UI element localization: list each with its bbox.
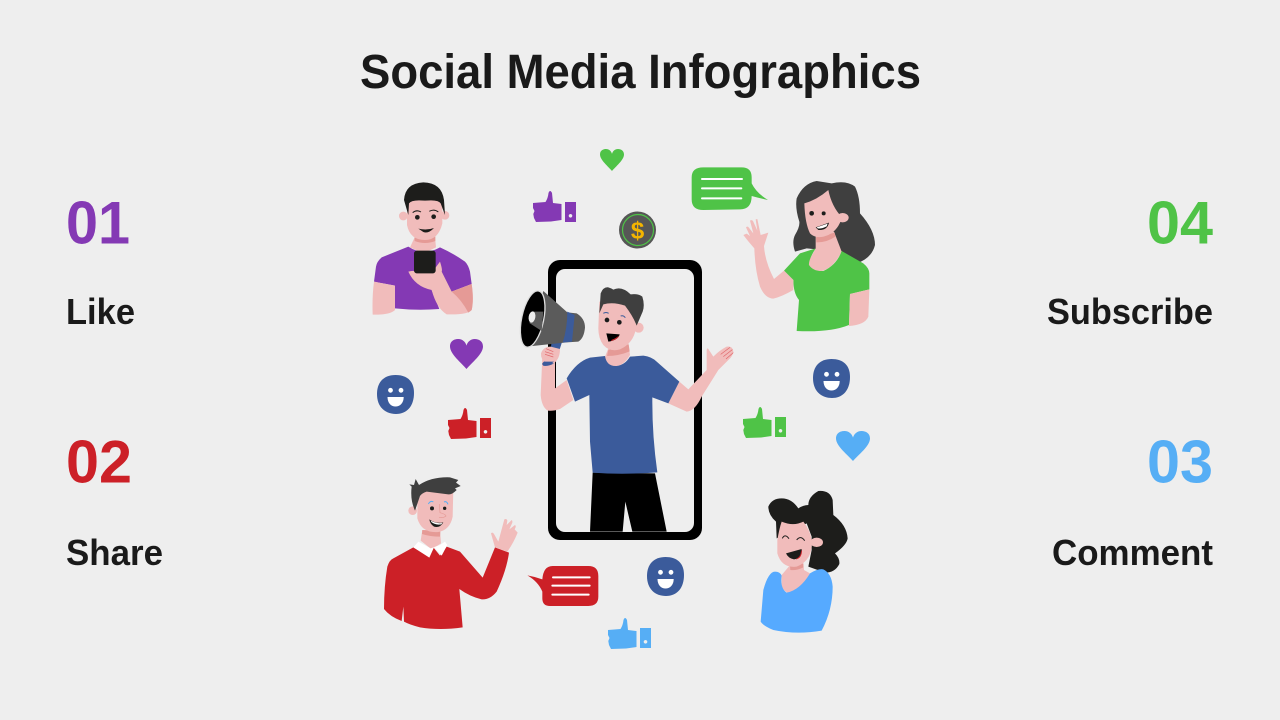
icon: green heart top [600, 149, 624, 171]
icon: smiley bottom [647, 557, 684, 596]
icon: purple thumbs up [533, 191, 576, 222]
item 01: Like [66, 190, 135, 332]
icon: smiley left [377, 375, 414, 414]
icon: green speech bubble [692, 167, 768, 210]
icon: blue thumbs up [608, 618, 651, 649]
item 03: Comment [1052, 428, 1213, 573]
label Share: Share [66, 532, 163, 573]
icon: blue heart [836, 431, 870, 461]
item 04: Subscribe [1047, 190, 1214, 332]
icon: red speech bubble [527, 566, 598, 606]
label Like: Like [66, 291, 135, 332]
person: green woman waving [743, 181, 875, 331]
number 01: 01 [66, 190, 130, 256]
icon: dollar coin: $ [631, 218, 645, 244]
number 04: 04 [1147, 190, 1214, 256]
title: Social Media Infographics [360, 46, 921, 99]
person: red man waving [384, 477, 518, 629]
item 02: Share [66, 428, 163, 573]
icon: green thumbs up [743, 407, 786, 438]
icon: purple heart [450, 339, 483, 369]
label Comment: Comment [1052, 532, 1213, 573]
label Subscribe: Subscribe [1047, 291, 1213, 332]
icon: red thumbs up [448, 408, 491, 439]
number 02: 02 [66, 428, 132, 496]
central man with megaphone [516, 287, 733, 532]
icon: smiley right [813, 359, 850, 398]
person: blue woman laughing [761, 491, 848, 633]
phone frame [548, 260, 702, 540]
number 03: 03 [1147, 428, 1213, 496]
person: purple man with phone [372, 182, 473, 315]
icon: dollar coin [619, 212, 656, 248]
icon: megaphone [516, 289, 585, 366]
